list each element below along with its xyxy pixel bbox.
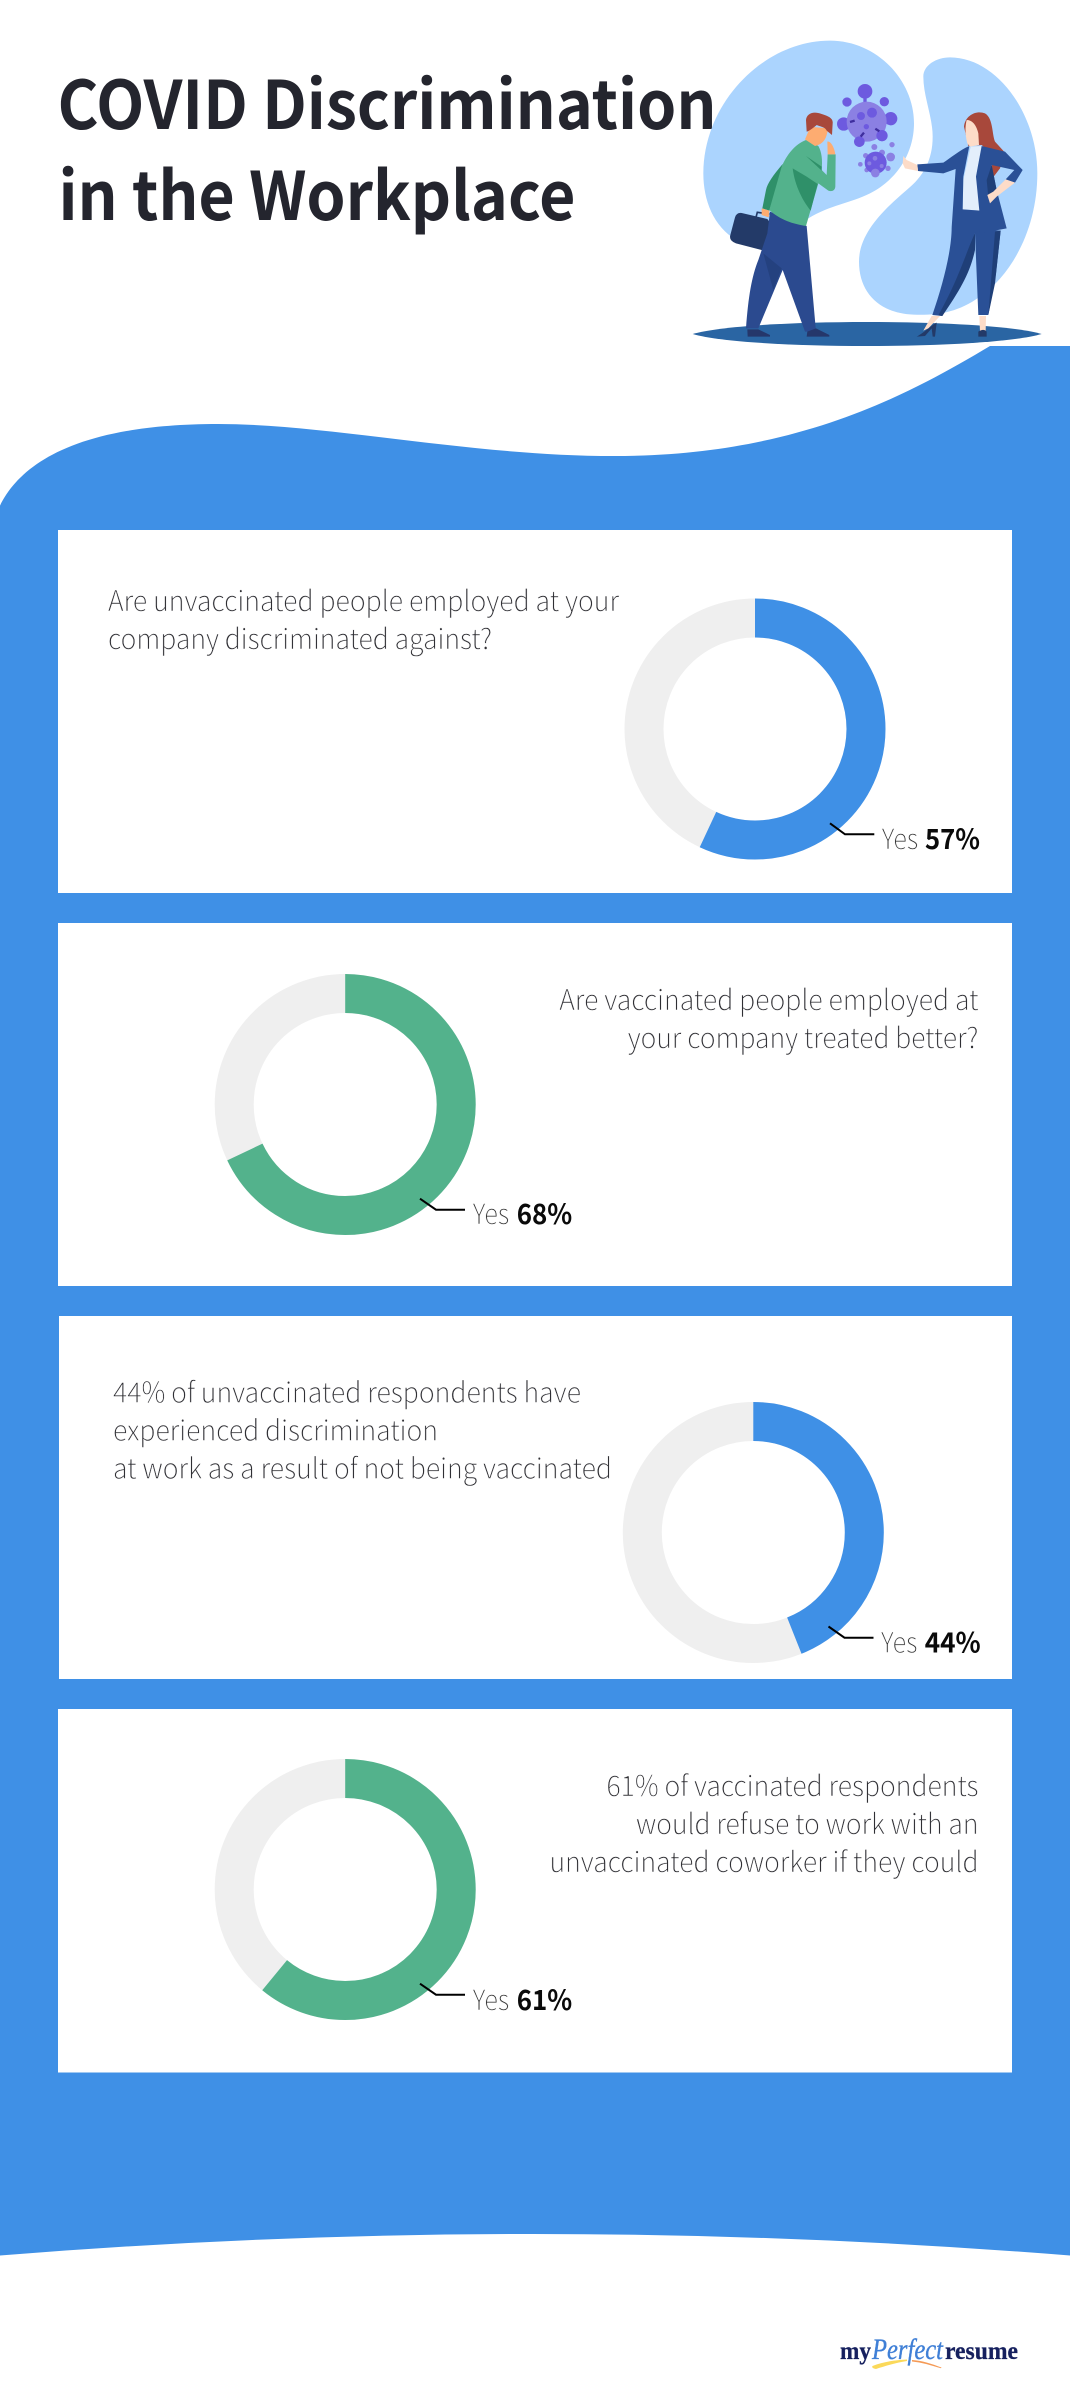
logo: myPerfectResume (840, 2333, 1018, 2369)
label: Yes 61%: 61% (517, 1979, 572, 2019)
question text: your company treated better? (628, 1016, 978, 1057)
question text (559, 978, 978, 1057)
statement text: 61% of vaccinated respondents (606, 1764, 978, 1805)
label: Yes 57%: 57% (925, 818, 980, 858)
shoes (747, 328, 829, 337)
label: Yes 68% (420, 1193, 572, 1233)
jacket (917, 146, 980, 233)
statement text: at work as a result of not being vaccinated (113, 1446, 612, 1487)
face (965, 120, 979, 147)
question text: Are unvaccinated people employed at your (108, 579, 620, 620)
label: Yes 44%: Yes (881, 1622, 918, 1662)
head and hand (805, 127, 828, 146)
background blobs (703, 41, 1037, 315)
logo: myPerfectResume: resume (945, 2338, 1018, 2365)
statement text: would refuse to work with an (636, 1802, 978, 1843)
woman in blue suit (903, 112, 1023, 337)
statement text (113, 1371, 612, 1487)
title: COVID Discrimination (58, 52, 716, 149)
label: Yes 61%: Yes (473, 1979, 509, 2019)
label: Yes 44% (828, 1622, 981, 1662)
back arm (762, 164, 783, 211)
briefcase (730, 213, 771, 251)
title: in the Workplace (58, 143, 576, 240)
label: Yes 57% (830, 818, 980, 858)
donut chart 61% (234, 1778, 456, 2000)
label: Yes 44%: 44% (925, 1622, 981, 1662)
panel: vaccinated treated better (58, 923, 1012, 1286)
trousers (932, 227, 1001, 316)
logo: myPerfectResume: Perfect (871, 2333, 944, 2366)
statement text: 44% of unvaccinated respondents have (113, 1371, 581, 1412)
statement text (550, 1764, 978, 1881)
shirt (963, 146, 982, 211)
panel: 61% refuse to work (58, 1709, 1012, 2072)
label: Yes 68%: Yes (473, 1193, 509, 1233)
donut chart 57% (644, 618, 866, 840)
trousers (746, 212, 816, 332)
virus small (858, 142, 895, 177)
illustration: coworkers and virus (693, 41, 1042, 346)
statement text: unvaccinated coworker if they could (550, 1840, 978, 1881)
question text: Are vaccinated people employed at (559, 978, 978, 1019)
sweater (769, 140, 836, 226)
blue wave background (0, 346, 1070, 2256)
hair (964, 112, 1005, 178)
hands (903, 156, 918, 171)
virus large (837, 84, 897, 147)
logo: myPerfectResume: my (840, 2338, 871, 2365)
question text (108, 579, 620, 658)
man with briefcase (730, 113, 836, 337)
donut chart 68% (234, 994, 456, 1216)
panel: 44% experienced discrimination (59, 1316, 1012, 1679)
label: Yes 61% (420, 1979, 572, 2019)
ground ellipse (693, 322, 1042, 346)
label: Yes 68%: 68% (517, 1193, 572, 1233)
donut chart 44% (642, 1422, 864, 1644)
label: Yes 57%: Yes (882, 818, 918, 858)
legs and shoes (923, 316, 986, 332)
title (58, 52, 716, 240)
statement text: experienced discrimination (113, 1409, 438, 1450)
panel: unvaccinated discriminated (58, 530, 1012, 893)
question text: company discriminated against? (108, 617, 492, 658)
